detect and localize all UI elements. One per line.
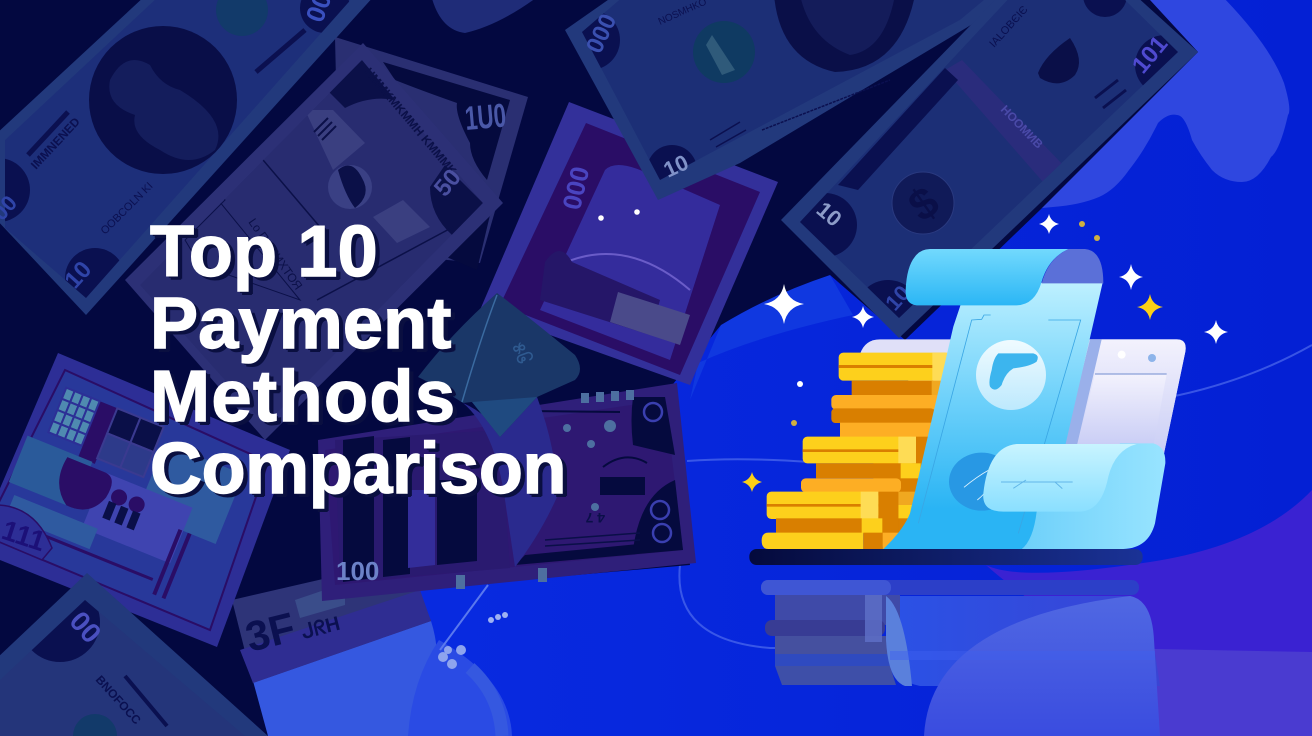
stripes [456, 390, 634, 589]
browser window [860, 339, 1186, 463]
banknote: front stacked: HMMKMKMMH KMMMK [362, 65, 460, 178]
platform [749, 549, 1143, 565]
title: Comparison [150, 429, 566, 509]
translucent leaf note [418, 293, 580, 567]
title: Top 10 [150, 212, 378, 292]
banknote: purple top center [480, 102, 778, 385]
banknote: right navy [781, 0, 1198, 344]
banknote: back stacked dark [335, 37, 528, 270]
background: light blue blob top right [1000, 0, 1289, 212]
banknote: right navy: HOOMИB [998, 102, 1046, 152]
banknote: lower center purple 100: 4 7 [585, 510, 605, 526]
blob: light blue lower center [253, 621, 437, 736]
receipt top roll back [1042, 249, 1103, 283]
blob: dark top center shape [431, 0, 540, 33]
banknote: top center navy: 000 [581, 10, 622, 58]
heart [1038, 38, 1079, 83]
banknote: bottom left navy [0, 573, 268, 736]
receipt inner outline [918, 315, 1081, 533]
coin [693, 21, 755, 83]
title: Payment [150, 284, 452, 364]
teal grid [48, 388, 100, 446]
banknote: right navy: IАLOBЄIЄ [987, 4, 1031, 50]
receipt logo circle [976, 340, 1046, 410]
receipt top roll front [906, 249, 1068, 305]
illustration: coins, receipt, window [749, 249, 1186, 565]
receipt lower circle [949, 453, 1014, 511]
portrait medallion [89, 26, 237, 174]
mosaic panel [0, 373, 249, 609]
banknote: top center navy: 10 [660, 150, 692, 183]
banknote: right navy: 101 [1127, 31, 1173, 79]
reflection of illustration [761, 580, 1160, 736]
banknote: front stacked [125, 43, 503, 440]
banknote: lower left purple [0, 353, 290, 647]
receipt body [883, 283, 1103, 549]
gold sparkles and dots [742, 221, 1163, 492]
dollar coin [892, 172, 954, 234]
background: purple wave lower right [986, 490, 1312, 736]
banknote: grey 3F [232, 560, 431, 683]
banknote: top left: IMMNENED [28, 114, 83, 172]
banknote: right navy: 10 [812, 197, 847, 232]
background: lighter blue band [690, 275, 853, 400]
signature strokes [1001, 480, 1073, 489]
receipt bottom roll back [1022, 443, 1165, 549]
title: Methods [150, 357, 456, 437]
sparkles [764, 214, 1228, 387]
arc and dots bottom center [438, 585, 508, 736]
translucent leaf note: ୫၆ [508, 339, 535, 366]
banknote: grey 3F: 3FᒍᖇH [241, 592, 343, 661]
background: lighter purple floor [1100, 648, 1312, 736]
receipt bottom roll front [983, 444, 1137, 512]
banknote: lower center purple 100 [318, 383, 696, 601]
banknote: right navy: $ [900, 177, 948, 231]
large dark medallion [774, 0, 915, 72]
banknote: top left: 10 [59, 256, 97, 294]
blob: soft circle bottom center [408, 640, 512, 736]
banknote: top left [0, 0, 375, 315]
coin stacks [762, 353, 950, 549]
banknote: bottom left navy: 00 [64, 605, 107, 649]
banknote: back stacked dark: 1U0 [463, 97, 508, 138]
banknote: top left: OOBCOLN KI [99, 180, 156, 237]
banknote: front stacked: Lo ПИЦИХТОЯ [246, 216, 305, 293]
banknote: top center navy [560, 0, 1020, 200]
banknote: front stacked: 50 [429, 164, 467, 202]
banknote: purple top center: 000 [556, 164, 595, 213]
title [150, 212, 567, 512]
banknote: lower center purple 100: 100 [336, 556, 379, 586]
banknote: right navy: 10 [880, 280, 915, 315]
banknote: bottom left navy: BNOFOCC [93, 673, 144, 727]
background: thin curve lines [679, 345, 1312, 648]
